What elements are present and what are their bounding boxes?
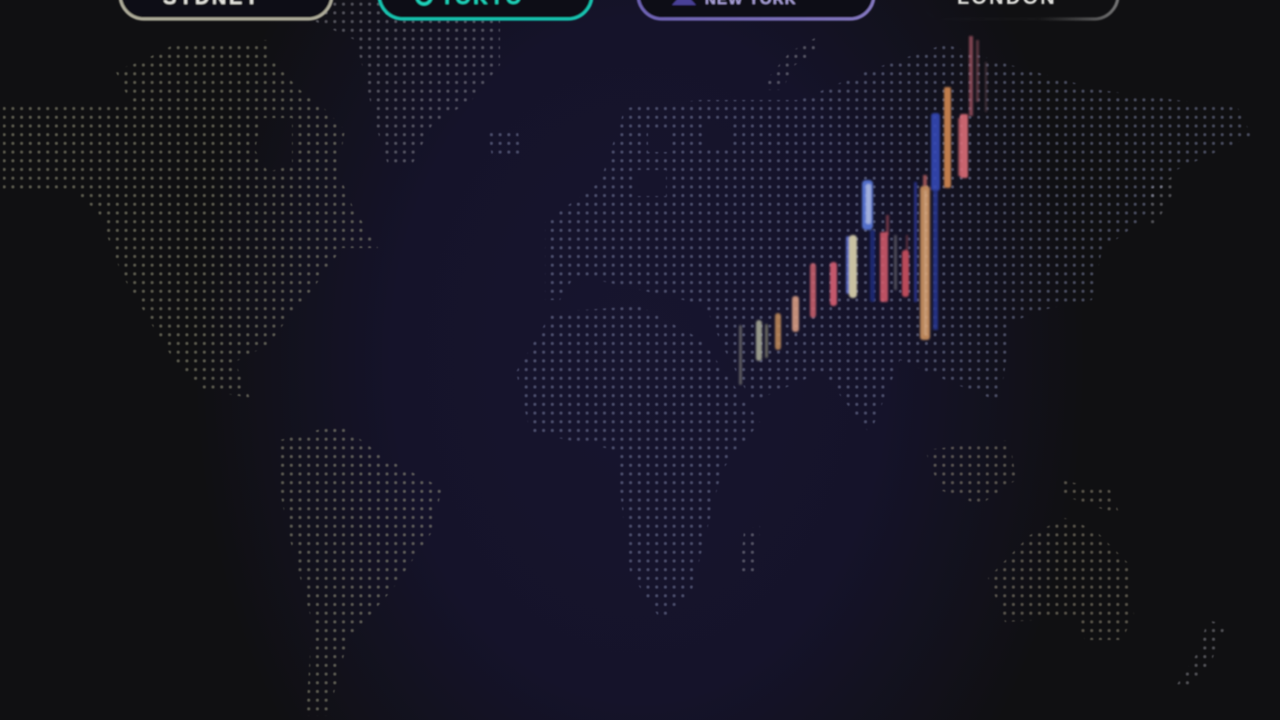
candle 1 — [739, 325, 742, 385]
candle 14 — [920, 175, 930, 340]
candle 4 — [775, 313, 781, 350]
map: Southeast Asia islands — [925, 440, 1016, 505]
session pill: London — [920, 0, 1118, 19]
candle 7 — [830, 262, 837, 306]
candle 15 — [931, 113, 940, 330]
candle 16 — [944, 87, 951, 188]
candle 19 — [976, 40, 979, 102]
session pill: New York — [638, 0, 874, 19]
candle 10 — [880, 215, 889, 302]
candlestick chart — [739, 36, 987, 385]
candle 11 — [894, 235, 897, 290]
candle 20 — [985, 62, 987, 112]
session pill: Tokyo — [379, 0, 592, 19]
session pills — [120, 0, 1118, 19]
candle 13 — [914, 182, 917, 302]
candle 18 — [969, 36, 973, 116]
map: Japan — [1146, 175, 1175, 226]
map: Greenland — [310, 0, 500, 165]
candle 6 — [810, 263, 816, 318]
candle 2 — [756, 320, 762, 361]
candle 3 — [765, 324, 768, 358]
map: Arctic islands — [768, 38, 820, 90]
icon: flag — [672, 0, 696, 5]
candle 12 — [902, 235, 909, 297]
map: South America — [278, 424, 442, 716]
map: Madagascar — [740, 526, 760, 574]
map: Iceland — [488, 128, 520, 158]
map: New Guinea — [1060, 480, 1120, 515]
candle 5 — [792, 296, 799, 332]
session pill: Sydney — [120, 0, 332, 19]
map: Eurasia — [545, 44, 1252, 434]
candle 9 — [862, 180, 875, 302]
candle 8 — [846, 235, 857, 298]
map: North America — [3, 40, 378, 398]
map: New Zealand — [1176, 620, 1226, 690]
map: Australia — [988, 518, 1134, 640]
candle 17 — [958, 114, 968, 178]
map: Africa — [516, 306, 760, 622]
